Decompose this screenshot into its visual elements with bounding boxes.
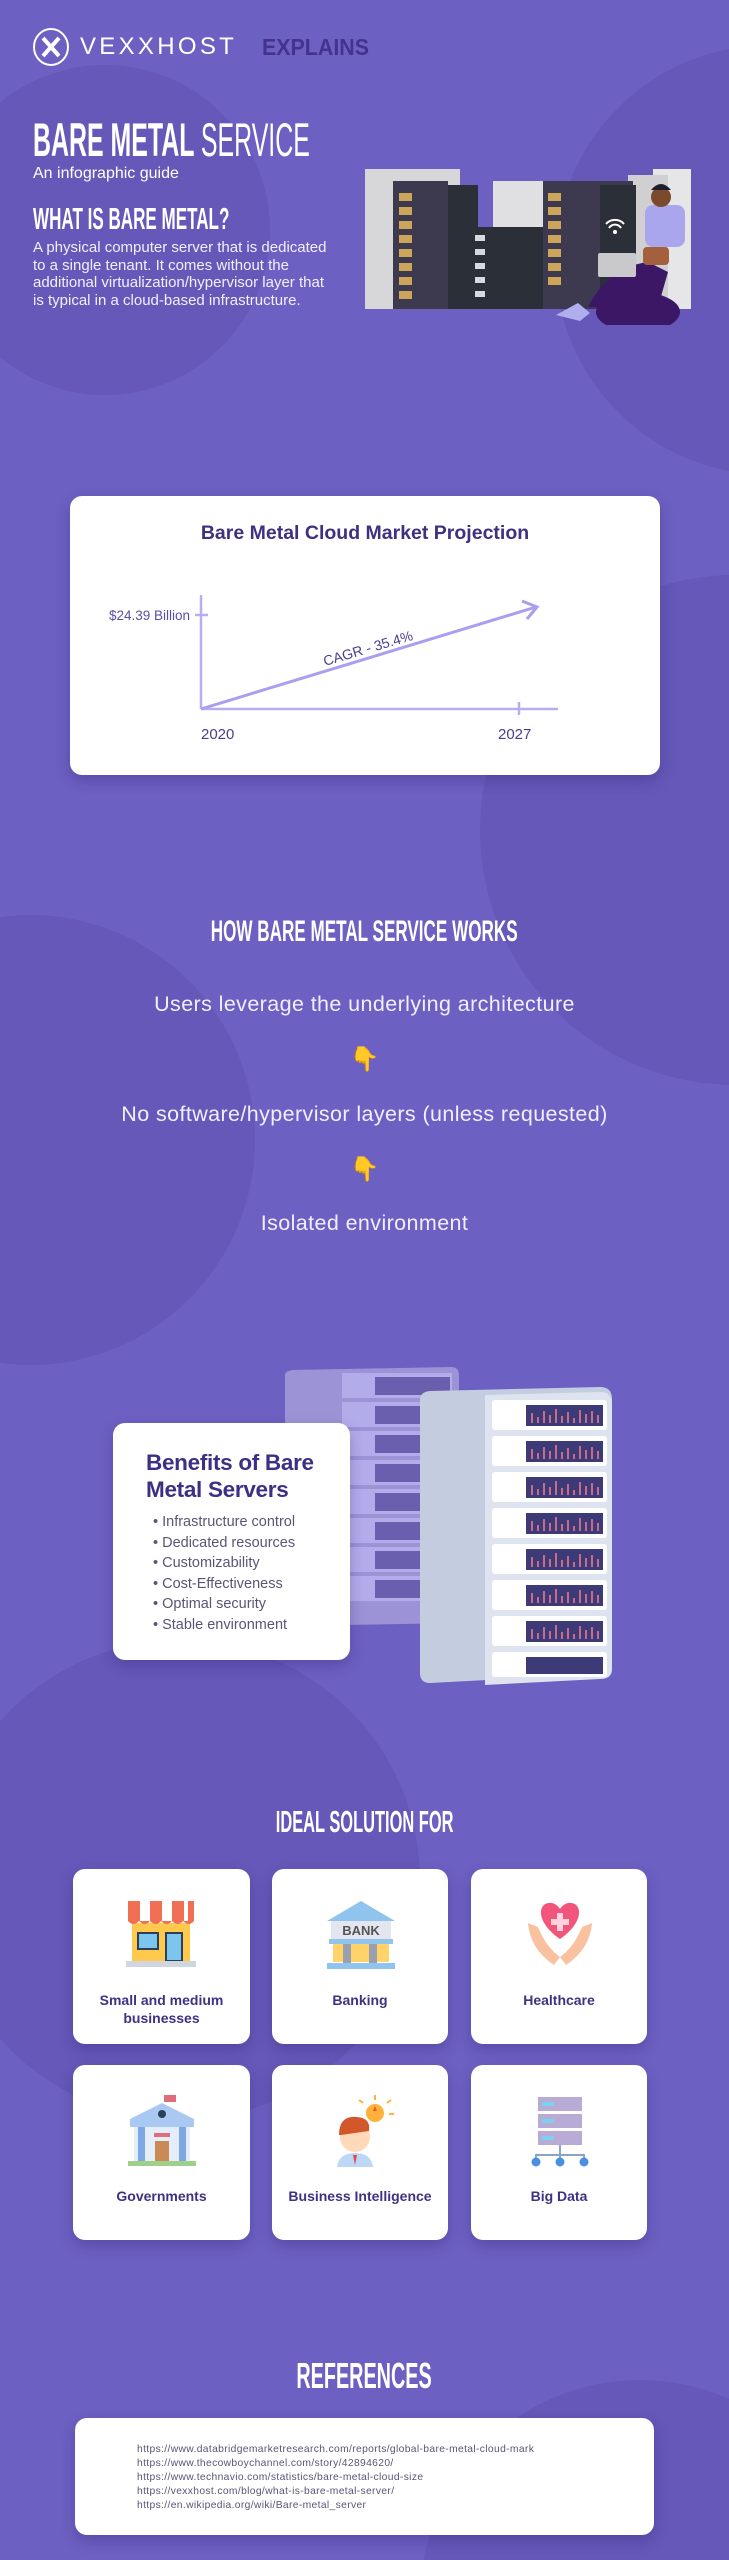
step 3: Isolated environment <box>261 1211 468 1235</box>
benefits list: • Dedicated resources <box>153 1535 295 1551</box>
panel: benefits <box>113 1423 350 1660</box>
references list: https://www.technavio.com/statistics/bare-metal-cloud-size <box>137 2472 423 2483</box>
references list: https://vexxhost.com/blog/what-is-bare-metal-server/ <box>137 2486 394 2497</box>
card: big data: Big Data <box>531 2188 587 2204</box>
card: big data <box>471 2065 647 2240</box>
card: governments <box>73 2065 250 2240</box>
icon: government building <box>128 2095 196 2166</box>
card: healthcare <box>471 1869 647 2044</box>
icon: shop <box>126 1901 196 1967</box>
benefits list: • Customizability <box>153 1555 260 1571</box>
benefits list: • Stable environment <box>153 1617 287 1633</box>
line chart: 2027 <box>498 726 531 743</box>
illustration: server racks <box>285 1367 612 1685</box>
card: small and medium businesses: Small and medium <box>100 1992 223 2008</box>
heading: references: REFERENCES <box>297 2355 432 2396</box>
subtitle: An infographic guide <box>33 165 179 182</box>
icon: heart in hands <box>528 1902 592 1965</box>
card: banking <box>272 1869 448 2044</box>
illustration: server room with person <box>365 169 691 325</box>
card: small and medium businesses: businesses <box>123 2010 200 2026</box>
references list: https://en.wikipedia.org/wiki/Bare-metal_server <box>137 2500 366 2511</box>
benefits list: • Infrastructure control <box>153 1514 295 1530</box>
definition text: A physical computer server that is dedicated to a single tenant. It comes without the additional virtualization/hypervisor layer that is typical in a cloud-based infrastructure. <box>33 239 326 308</box>
icon: bank: BANK <box>342 1923 380 1938</box>
chart title: Bare Metal Cloud Market Projection <box>201 522 529 544</box>
header logo: VEXXHOST <box>80 33 237 60</box>
card: healthcare: Healthcare <box>523 1992 595 2008</box>
chart card: market projection <box>70 496 660 775</box>
card: business intelligence <box>272 2065 448 2240</box>
icon: bank <box>327 1901 395 1969</box>
heading: what is bare metal: WHAT IS BARE METAL? <box>33 201 229 236</box>
heading: how it works: HOW BARE METAL SERVICE WORKS <box>211 915 518 948</box>
card: business intelligence: Business Intelligence <box>288 2188 432 2204</box>
step 2: No software/hypervisor layers (unless requested) <box>121 1102 608 1126</box>
benefits heading: Metal Servers <box>146 1477 288 1502</box>
benefits list: • Optimal security <box>153 1596 266 1612</box>
card: banking: Banking <box>332 1992 388 2008</box>
step 1: Users leverage the underlying architecture <box>154 992 575 1016</box>
header logo: EXPLAINS <box>262 34 369 60</box>
benefits heading: Benefits of Bare <box>146 1450 314 1475</box>
line chart: CAGR - 35.4% <box>321 627 415 669</box>
benefits list <box>153 1514 295 1633</box>
benefits heading <box>146 1450 314 1502</box>
references list <box>75 2418 654 2535</box>
card: small and medium businesses <box>73 1869 250 2044</box>
line chart: $24.39 Billion <box>109 608 190 623</box>
arrow: pointing down 1: 👇 <box>350 1046 379 1073</box>
title: BARE METAL SERVICE <box>33 113 310 166</box>
header logo <box>33 28 369 66</box>
heading: ideal solution for: IDEAL SOLUTION FOR <box>276 1804 453 1839</box>
icon: server stack network <box>532 2097 588 2166</box>
references list: https://www.databridgemarketresearch.com/reports/global-bare-metal-cloud-mark <box>137 2444 534 2455</box>
arrow: pointing down 2: 👇 <box>350 1156 379 1183</box>
benefits list: • Cost-Effectiveness <box>153 1576 283 1592</box>
card: governments: Governments <box>116 2188 207 2204</box>
line chart <box>109 595 558 743</box>
line chart: 2020 <box>201 726 234 743</box>
references list: https://www.thecowboychannel.com/story/42894620/ <box>137 2458 394 2469</box>
icon: person with idea bulb <box>337 2095 394 2167</box>
